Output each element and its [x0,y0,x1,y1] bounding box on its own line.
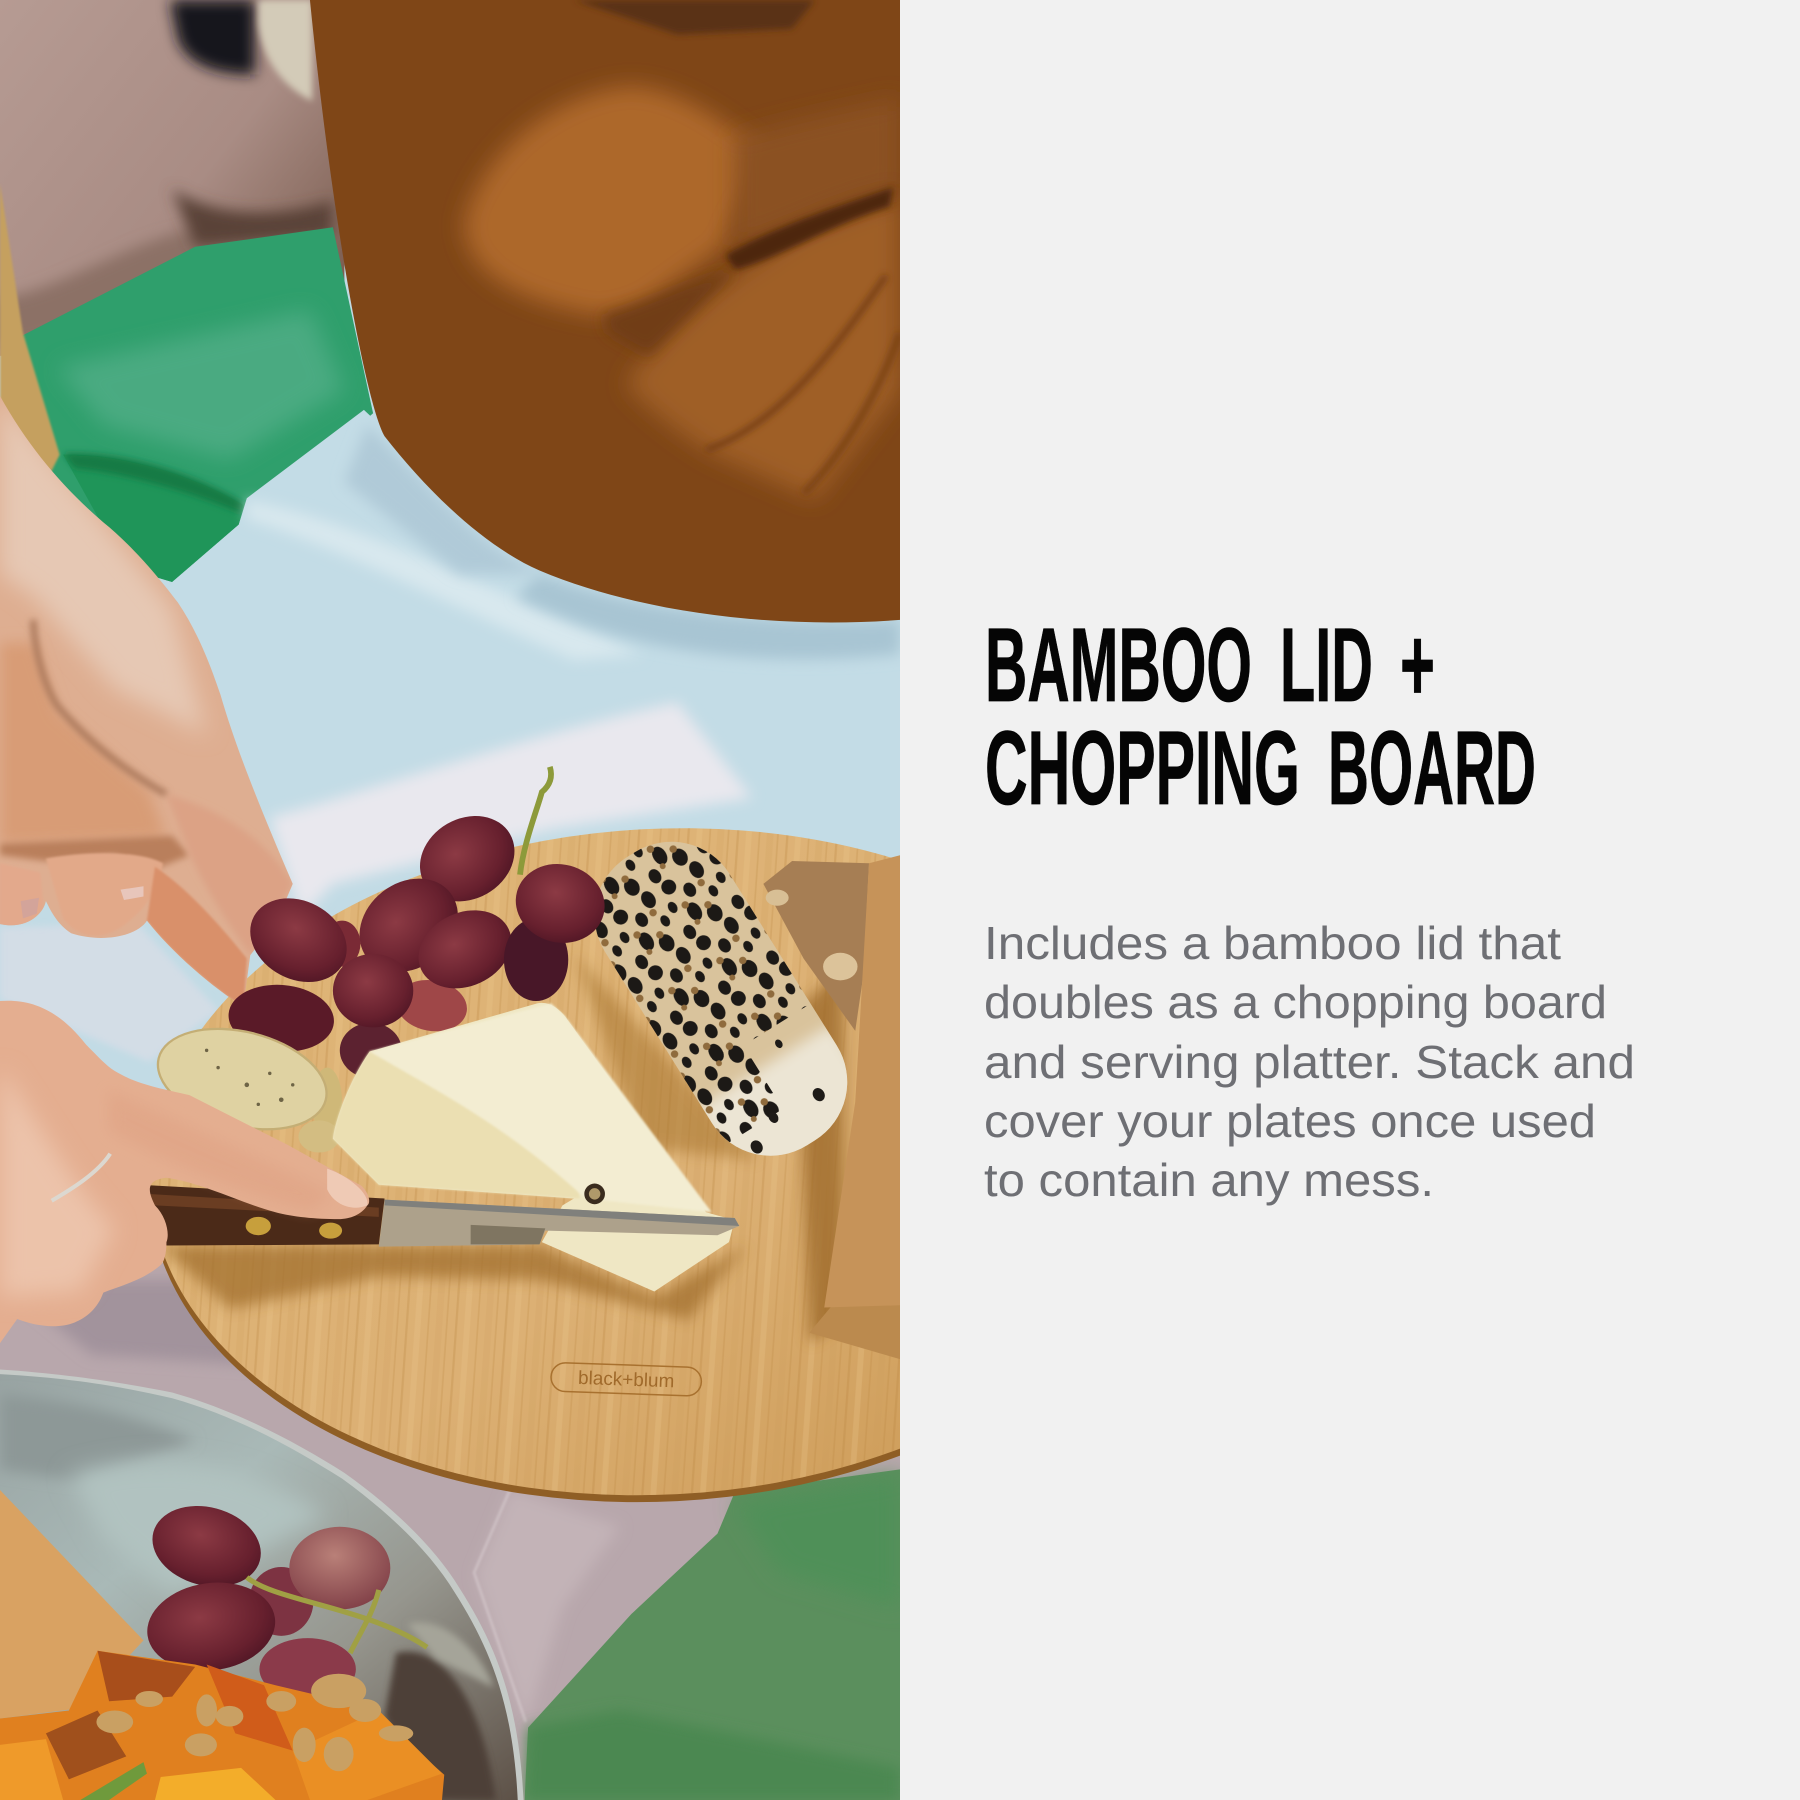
round crackers [156,1028,342,1152]
heading: CHOPPING [985,710,1300,827]
heading: + [1400,607,1435,724]
heading [985,607,1536,827]
mauve blanket, lower [0,1263,900,1800]
flatbread in bowl [0,1490,143,1718]
body text: Includes a bamboo lid that [984,917,1561,969]
steel bowl [0,1370,523,1800]
board shadows [161,1246,746,1320]
body text: doubles as a chopping board [984,976,1607,1028]
logo: black+blum [551,1362,702,1396]
panel: text background [984,607,1635,1206]
heading: LID [1280,607,1373,724]
roasted squash and seeds [0,1651,444,1800]
green blanket, lower [525,1469,900,1800]
seated person's leg, top left [0,0,344,356]
grapes in bowl [141,1494,427,1700]
heading: BOARD [1328,710,1536,827]
background blanket base [0,264,552,1263]
photo panel: picnic scene [0,0,900,1800]
body text [984,917,1635,1206]
body text: to contain any mess. [984,1154,1434,1206]
knife [140,1185,739,1247]
grapes on board [226,767,614,1078]
pepper-crusted log cheese [596,842,848,1156]
tan sleeve [0,184,60,482]
upper hand [0,396,293,1007]
bamboo board [150,828,900,1502]
crispbreads, right [763,855,900,1359]
green blanket, upper [21,227,373,582]
ring [52,1154,110,1201]
brown garment [310,0,900,622]
cheese wedge [333,1003,735,1291]
body text: cover your plates once used [984,1095,1596,1147]
wood grain [159,828,900,1495]
heading: BAMBOO [985,607,1252,724]
lower hand holding knife [0,1001,369,1343]
logo: black+blum: black+blum [578,1368,675,1392]
body text: and serving platter. Stack and [984,1036,1635,1088]
pale blue and white blanket [0,410,900,1062]
